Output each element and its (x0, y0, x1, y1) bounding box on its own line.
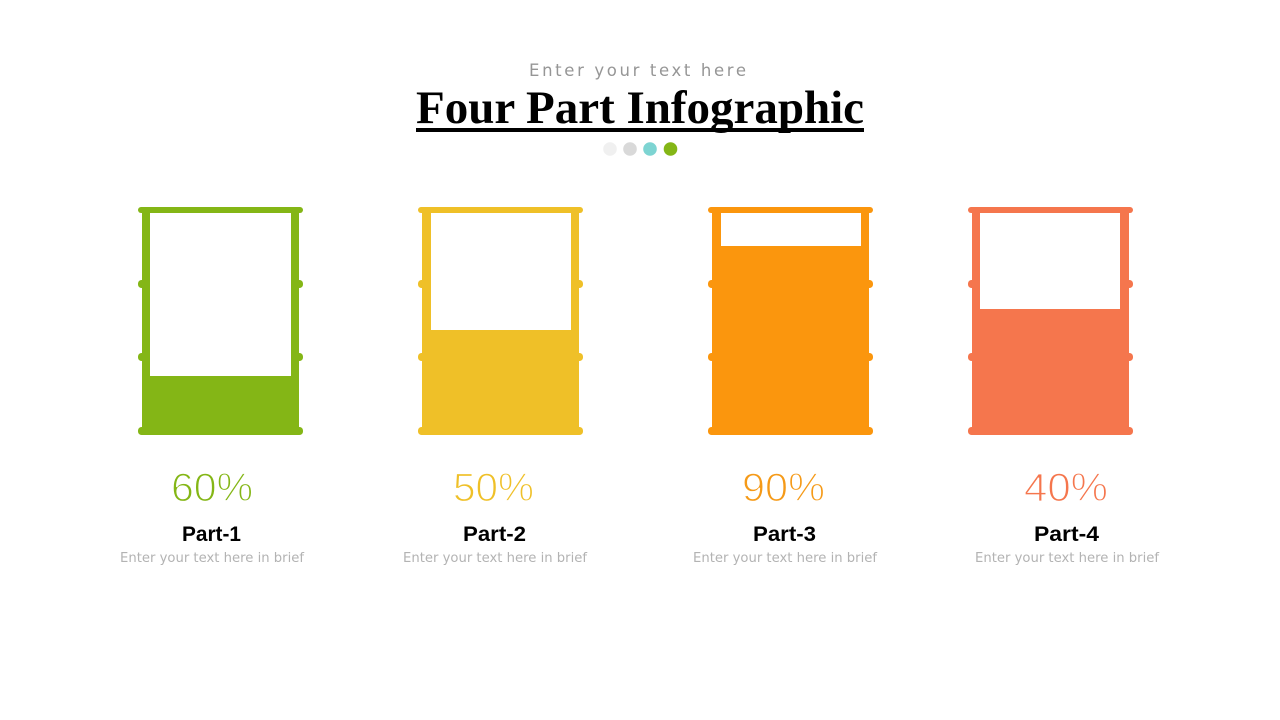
barrel 1: green, 60% (138, 207, 303, 435)
part 4 text: Part-4 (1034, 523, 1099, 546)
part 2 text: Enter your text here in brief (403, 551, 587, 566)
barrel 2: yellow, 50% (418, 207, 583, 435)
part 1 text: Enter your text here in brief (120, 551, 304, 566)
part 3 text: Part-3 (753, 523, 816, 546)
part 2 text (403, 466, 587, 566)
part 1 text (120, 466, 304, 566)
part 3 text: 90% (742, 466, 825, 510)
part 2 text: Part-2 (463, 523, 526, 546)
part 3 text: Enter your text here in brief (693, 551, 877, 566)
part 4 text: 40% (1024, 466, 1108, 510)
part 4 text (975, 466, 1159, 566)
barrel 4: coral, 40% (968, 207, 1133, 435)
subtitle: Enter your text here (529, 61, 746, 80)
barrel 3: orange, 90% (708, 207, 873, 435)
part 3 text (693, 466, 877, 566)
title: Four Part Infographic (416, 82, 864, 134)
part 1 text: 60% (171, 466, 253, 510)
decorative dots (603, 142, 677, 156)
part 4 text: Enter your text here in brief (975, 551, 1159, 566)
part 1 text: Part-1 (182, 523, 241, 546)
part 2 text: 50% (453, 466, 534, 510)
